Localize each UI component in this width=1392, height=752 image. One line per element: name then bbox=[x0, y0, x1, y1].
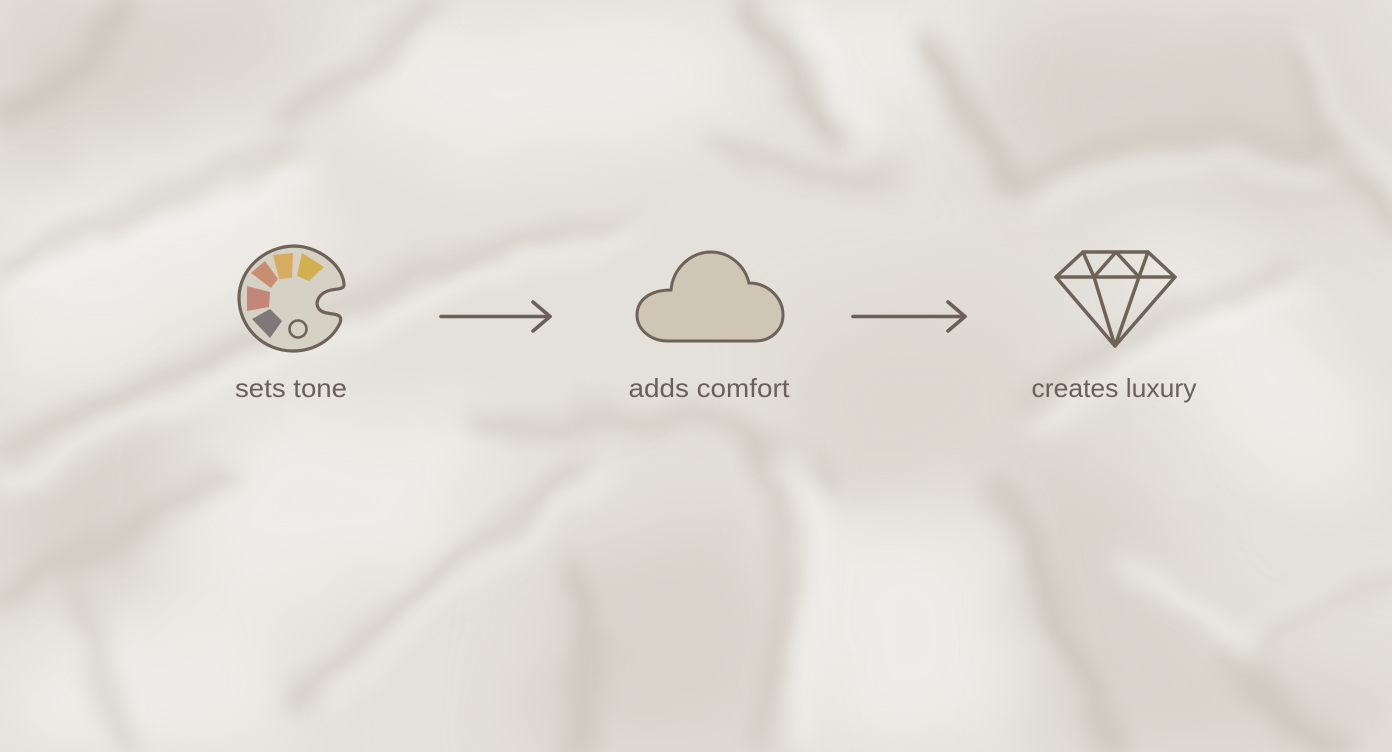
label: creates luxury: creates luxury bbox=[1032, 373, 1196, 403]
icon: diamond bbox=[1056, 252, 1175, 346]
icon: painter's palette bbox=[239, 246, 344, 351]
arrow: sets tone to adds comfort bbox=[441, 302, 550, 331]
icon: cloud bbox=[637, 252, 783, 341]
label: adds comfort: adds comfort bbox=[628, 373, 790, 403]
label: sets tone: sets tone bbox=[235, 373, 347, 403]
arrow: adds comfort to creates luxury bbox=[853, 302, 965, 331]
